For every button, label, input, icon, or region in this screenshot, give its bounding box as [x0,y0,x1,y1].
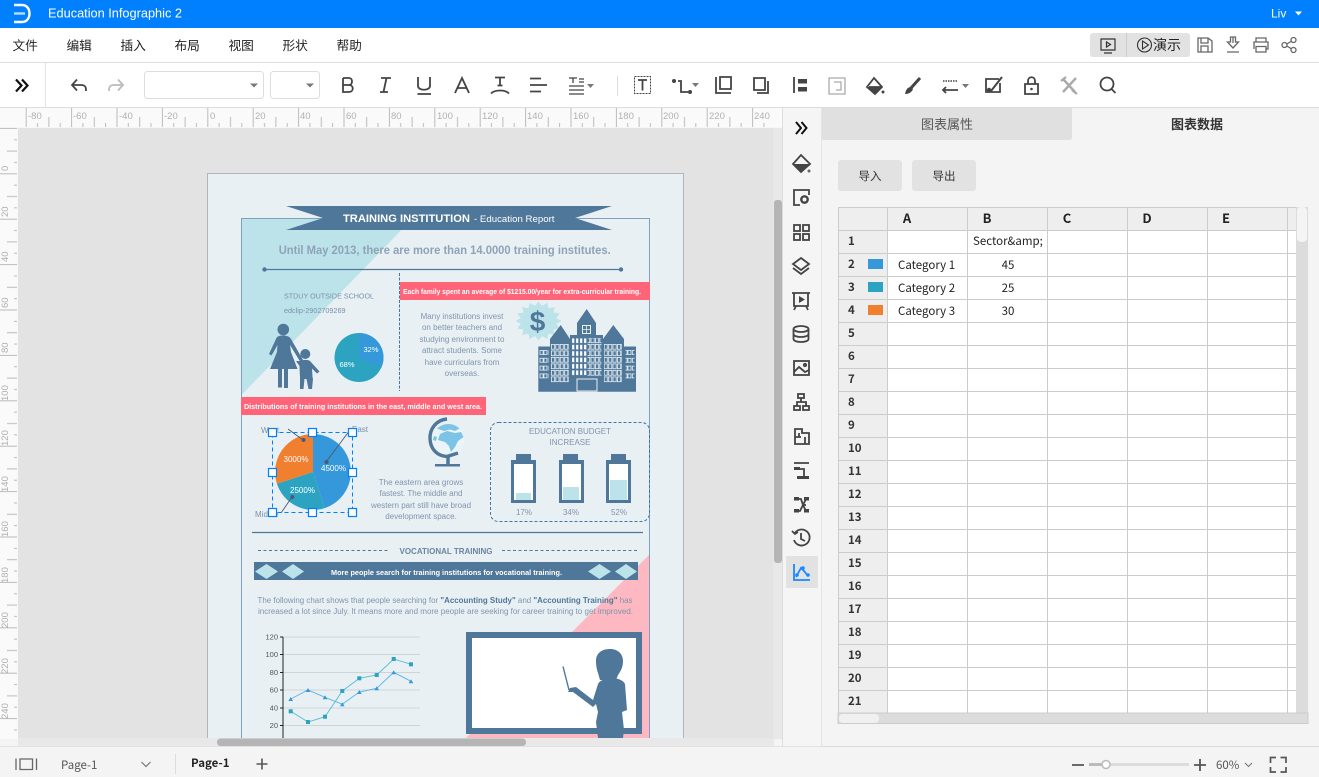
horizontal ruler: 140 [527,111,543,122]
row numbers: 6 [848,348,855,364]
icon: mother and child [269,324,320,389]
menu bar [0,28,1319,63]
row numbers: 19 [848,647,862,663]
cell values: Category 3 [898,303,955,319]
text: eastern area: western part still have broad [370,501,471,510]
formatting toolbar [0,63,1319,108]
battery 52% [606,454,631,517]
tab: chart properties: 图表属性 [921,114,973,133]
cell values: 30 [1002,303,1014,319]
text: institutions invest: attract students. Some [422,346,503,355]
icon: fill [793,155,810,172]
chart: line chart [265,632,420,738]
series: accounting study [288,670,413,706]
cell values: Sector&amp; [973,233,1043,249]
text: institutions invest: on better teachers and [422,323,502,332]
user menu: Liv [1271,6,1286,20]
right panel [822,108,1319,746]
text: institutions invest: overseas. [445,369,479,378]
menu bar: 编辑 [66,35,92,54]
menu bar: 帮助 [336,35,362,54]
chart: regional pie with selection: West [261,426,280,435]
chart: regional pie with selection [255,425,369,519]
row numbers: 12 [848,486,862,502]
horizontal ruler: 80 [391,111,402,122]
shape and style icons [634,76,1116,94]
chart: regional pie with selection: 4500% [321,464,346,473]
icon: database [794,326,808,342]
page selector [61,757,150,773]
vertical ruler: 200 [0,612,11,628]
text: institutions invest: have curriculars from [425,358,500,367]
title ribbon: TRAINING INSTITUTION [343,213,470,225]
chart: line chart: 40 [270,704,278,712]
button: export: 导出 [932,168,956,184]
horizontal ruler: 200 [663,111,679,122]
user menu [1271,6,1302,20]
row numbers: 16 [848,578,862,594]
vertical ruler: 160 [0,521,11,537]
vertical ruler: 80 [0,342,11,353]
decorative triangle top left [242,218,413,395]
vertical ruler [0,127,18,739]
tab: chart properties [822,108,1072,140]
button: import [838,160,902,191]
text: chart description: The following chart shows that people searching for "Accounting Study" and "Accounting Training" has [258,596,632,605]
text: chart description: increased a lot since July. It means more and more people are seeking for career training to get improved. [258,607,633,616]
icon: page view [16,758,36,770]
chart: regional pie with selection: 3000% [284,455,308,464]
vertical ruler: 120 [0,430,11,446]
icons: undo and redo [72,80,123,91]
text: institutions invest [420,312,505,378]
menu bar: 插入 [120,35,146,54]
column headers: B [983,208,992,227]
text: institutions invest: studying environment to [420,335,505,344]
chart: line chart: 120 [265,632,278,642]
row numbers: 7 [848,371,855,387]
chart: line chart: 100 [265,650,278,659]
cell values [898,233,1043,319]
button: export [912,160,976,191]
icons: save, download, print, share [1198,37,1296,52]
horizontal ruler: 220 [709,111,725,122]
horizontal ruler: -80 [28,111,42,122]
font size select [270,72,320,98]
row numbers: 21 [848,693,862,709]
battery 17% [511,454,536,517]
zoom controls [1072,757,1252,773]
vertical ruler: 220 [0,658,11,674]
row numbers: 18 [848,624,862,640]
cell values: 45 [1002,257,1014,273]
cell values: Category 2 [898,280,955,296]
horizontal ruler: 180 [618,111,634,122]
panel: education budget: INCREASE [550,438,590,447]
icon: grid [794,225,809,240]
heading: vocational training: VOCATIONAL TRAINING [400,546,493,556]
text format icons [343,77,594,94]
text: institutions invest: Many institutions invest [421,312,504,321]
vertical ruler: 140 [0,476,11,492]
panel: education budget: EDUCATION BUDGET [529,427,611,436]
chart: regional pie with selection: Middle [255,510,279,519]
button: import: 导入 [858,168,882,184]
row numbers: 20 [848,670,862,686]
row numbers: 9 [848,417,855,433]
legend swatches [868,259,883,315]
text: eastern area: The eastern area grows [379,478,463,487]
icon: chart data active [786,556,818,588]
vertical ruler: 180 [0,567,11,583]
menu bar: 形状 [282,35,308,54]
battery 34%: 34% [563,508,579,517]
section: study outside school: edclip-2902709269 [284,308,346,315]
text: eastern area: development space. [385,512,457,521]
banner: more people search: More people search for training institutions for vocational training. [331,568,562,577]
section: study outside school [269,294,384,389]
icon: collapse [796,122,806,134]
icon: history [792,530,810,546]
text: chart description [258,596,633,616]
row numbers: 15 [848,555,862,571]
sidebar icon rail [782,108,822,746]
vertical ruler: 20 [0,206,11,217]
chart: line chart: 60 [270,686,278,694]
icon: presentation [792,293,810,310]
row numbers: 5 [848,325,855,341]
chart: regional pie with selection: East [352,425,369,434]
horizontal ruler: 100 [437,111,453,122]
text: eastern area: fastest. The middle and [379,489,463,498]
page frame [242,218,650,738]
cell values: Category 1 [898,257,955,273]
illustration: teacher at blackboard [466,632,642,738]
icon: gantt [794,463,809,479]
horizontal canvas scrollbar [18,738,774,746]
menu bar: 文件 [12,35,38,54]
pie slices [275,434,351,510]
section: study outside school: STDUY OUTSIDE SCHOOL [284,294,374,300]
row numbers [848,233,862,709]
horizontal ruler: 0 [210,111,215,122]
icon: layers [793,258,809,274]
vertical ruler: 0 [0,166,11,171]
chart: regional pie with selection: 2500% [290,486,315,495]
menu bar: 视图 [228,35,254,54]
row numbers: 14 [848,532,862,548]
series: accounting training [289,657,413,724]
decorative triangle bottom right [466,554,650,738]
table scrollbars [838,207,1308,724]
headline divider [262,267,623,272]
chart: study share pie: 68% [339,360,355,369]
horizontal ruler [0,108,783,128]
selection handles [268,428,356,516]
data table [838,207,1308,724]
canvas background [18,128,773,738]
horizontal ruler: 40 [300,111,311,122]
horizontal ruler: 120 [482,111,498,122]
column headers: A [902,208,912,227]
icon: add page [256,758,268,770]
banner: more people search [254,562,638,580]
horizontal ruler: -40 [119,111,133,122]
callout: family spending: Each family spent an average of $1215.00/year for extra-curricular training. [403,289,641,296]
horizontal ruler: 60 [346,111,357,122]
icon: collapse chevrons [16,80,28,92]
icon: mind map [794,497,809,512]
icon: page settings [794,190,809,205]
title ribbon [286,206,612,230]
row numbers: 13 [848,509,862,525]
row numbers: 8 [848,394,855,410]
horizontal ruler: -20 [164,111,178,122]
top title bar [0,0,1319,28]
chart: line chart: 20 [270,721,278,730]
infographic page [208,174,684,738]
present button group [1090,33,1190,57]
callout: family spending [400,282,650,300]
icon: dollar badge: $ [530,306,546,337]
current page tab: Page-1 [191,755,230,771]
column headers: D [1142,208,1152,227]
font family select [144,72,264,98]
horizontal ruler: -60 [73,111,87,122]
icon: fullscreen [1270,758,1286,772]
menu bar: 布局 [174,35,200,54]
row numbers: 3 [848,279,855,295]
callout: distributions [241,397,486,415]
row numbers: 4 [848,302,855,318]
battery 52%: 52% [611,508,627,517]
present button group: 演示 [1153,35,1181,55]
vertical canvas scrollbar [773,128,782,739]
vertical ruler: 60 [0,297,11,308]
vertical ruler: 100 [0,385,11,401]
battery 17%: 17% [516,508,532,517]
battery 34% [559,454,584,517]
row numbers: 17 [848,601,862,617]
title ribbon: - Education Report [474,214,555,225]
callout: distributions: Distributions of training institutions in the east, middle and west area. [244,404,482,411]
page selector: Page-1 [61,757,97,773]
document title: Education Infographic 2 [48,6,182,20]
chart: study share pie [334,333,384,382]
text: eastern area [370,478,471,521]
icon: school building [538,309,636,392]
icon: dollar badge [516,301,562,341]
horizontal ruler: 160 [573,111,589,122]
column headers: C [1063,208,1072,227]
horizontal ruler: 20 [255,111,266,122]
headline: Until May 2013, there are more than 14.0000 training institutes. [279,245,611,257]
row numbers: 11 [848,463,862,479]
chart: line chart: 80 [270,668,278,677]
column headers: E [1222,208,1230,227]
icon: org chart [794,394,809,410]
chart: study share pie: 32% [363,345,379,354]
zoom controls: 60% [1216,757,1240,773]
panel: education budget [490,422,650,522]
icon: globe [430,419,464,466]
row numbers: 10 [848,440,862,456]
row numbers: 2 [848,256,855,272]
tab: chart data: 图表数据 [1171,114,1223,133]
row numbers: 1 [848,233,855,249]
column headers [902,208,1230,227]
vertical ruler: 240 [0,703,11,719]
cell values: 25 [1002,280,1014,296]
teacher silhouette [563,649,627,738]
horizontal ruler: 240 [754,111,770,122]
icon: app logo [14,5,30,22]
icon: floor plan [795,429,809,444]
vertical ruler: 40 [0,251,11,262]
bottom status bar [0,746,1319,777]
icon: image [794,361,809,375]
leader lines [281,429,350,513]
